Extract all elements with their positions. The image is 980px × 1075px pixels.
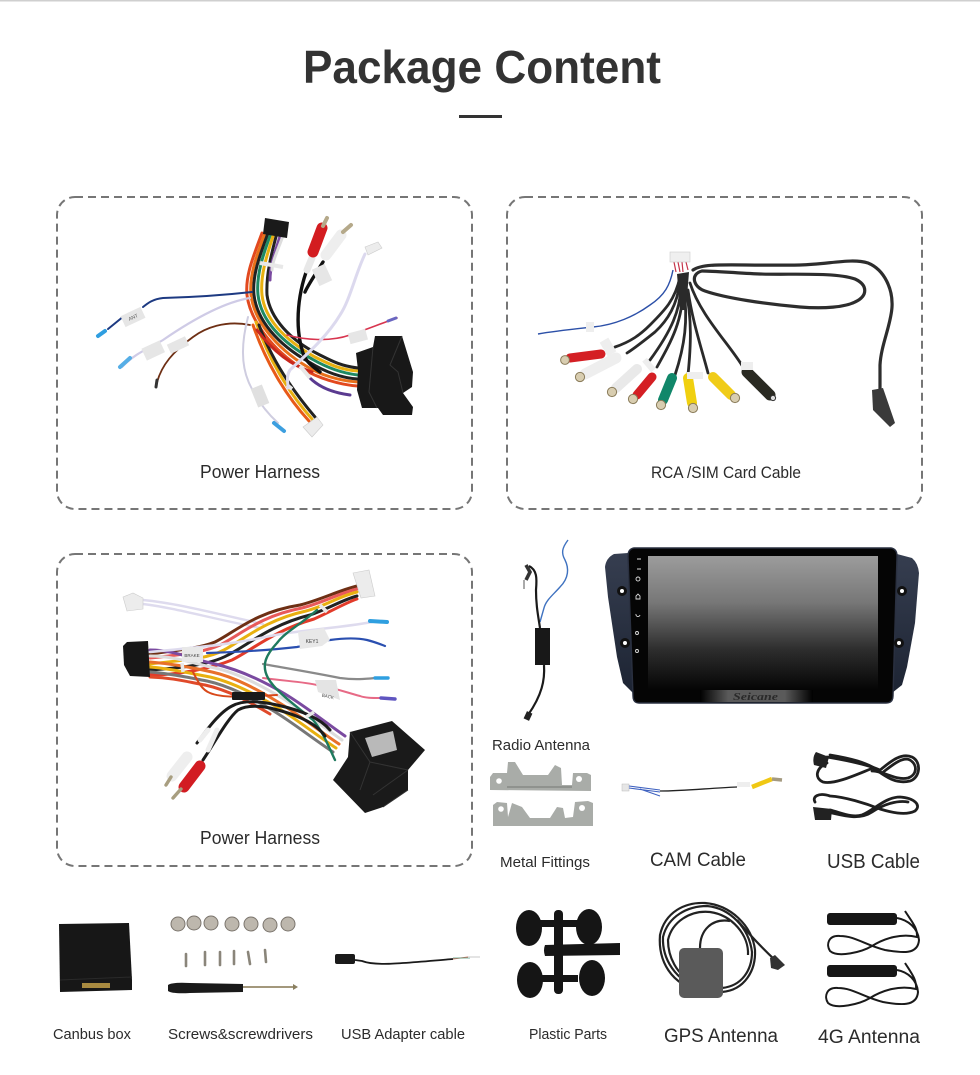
item: GPS antenna (660, 903, 785, 1047)
wire labels (182, 628, 340, 700)
white connectors (303, 242, 382, 437)
item: metal fittings (490, 762, 593, 871)
thick harness trunk (677, 272, 689, 310)
label: USB Adapter cable (341, 1026, 465, 1043)
top connector (263, 218, 289, 238)
wire bundle lower (150, 650, 345, 752)
long black cable (693, 261, 892, 392)
label: Radio Antenna (492, 737, 591, 754)
item: plastic parts (516, 909, 620, 1043)
cable ties (260, 263, 310, 389)
wire labels: BRAKE (184, 653, 200, 658)
wire bundle (247, 233, 358, 421)
item: head unit (605, 548, 919, 703)
side buttons (636, 559, 641, 652)
item: radio antenna (492, 540, 591, 754)
top-right white connector (353, 570, 375, 598)
item: USB cable (813, 752, 920, 873)
multi-colour wire ends (674, 262, 688, 272)
label: Canbus box (53, 1026, 131, 1043)
GPS puck (679, 948, 723, 998)
item: USB adapter cable (335, 954, 480, 1043)
screen (648, 556, 878, 689)
panel: power harness 2 (57, 554, 472, 866)
label: GPS Antenna (664, 1026, 778, 1047)
inline black connector (232, 692, 265, 700)
left connector (123, 641, 150, 677)
label: Metal Fittings (500, 854, 590, 871)
item: canbus box (53, 923, 132, 1043)
screwdriver (168, 983, 243, 993)
white wires to left connector (143, 600, 263, 628)
decoder sticker (365, 731, 397, 757)
RCA plugs (298, 218, 351, 372)
small screws (186, 950, 266, 966)
logo strip (700, 690, 813, 702)
panel: power harness 1 (57, 197, 472, 509)
item: screws and screwdriver (168, 916, 313, 1043)
wire labels (120, 264, 368, 408)
label: CAM Cable (650, 849, 746, 871)
mount holes (618, 588, 906, 646)
cable ties (182, 605, 327, 717)
RCA plugs (561, 354, 776, 413)
item: 4G antenna (818, 911, 920, 1048)
label: Power Harness (200, 828, 320, 848)
label: 4G Antenna (818, 1027, 920, 1048)
label: Power Harness (200, 462, 320, 482)
title underline (459, 115, 502, 118)
thin wires (150, 610, 395, 760)
bezel (628, 548, 897, 703)
top-left white connector (123, 593, 143, 611)
GPS connector (770, 955, 785, 970)
side wings (605, 553, 645, 693)
wire labels (586, 322, 753, 379)
wire bundle upper (150, 586, 357, 675)
thin wires (98, 254, 397, 431)
wire labels: ANT (128, 313, 139, 323)
blue wire (538, 270, 673, 334)
SIM module (872, 388, 895, 427)
label: Screws&screwdrivers (168, 1026, 313, 1043)
large screws (171, 916, 295, 932)
label: RCA /SIM Card Cable (651, 464, 801, 482)
panel: RCA / SIM card cable (507, 197, 922, 509)
item: CAM cable (622, 779, 782, 871)
label: USB Cable (827, 851, 920, 873)
title: Package Content (303, 41, 661, 93)
quadlock connector (356, 336, 413, 415)
RCA plugs (166, 730, 217, 798)
black RCA wires (197, 702, 330, 760)
label: Plastic Parts (529, 1027, 607, 1043)
brand: Seicane (733, 691, 778, 703)
wire labels: BACK (321, 693, 334, 700)
right wing (880, 553, 919, 693)
black fan-out wires (615, 277, 743, 375)
decoder connector (333, 721, 425, 813)
wire labels: KEY1 (306, 639, 319, 645)
ribbon connector (670, 252, 690, 262)
